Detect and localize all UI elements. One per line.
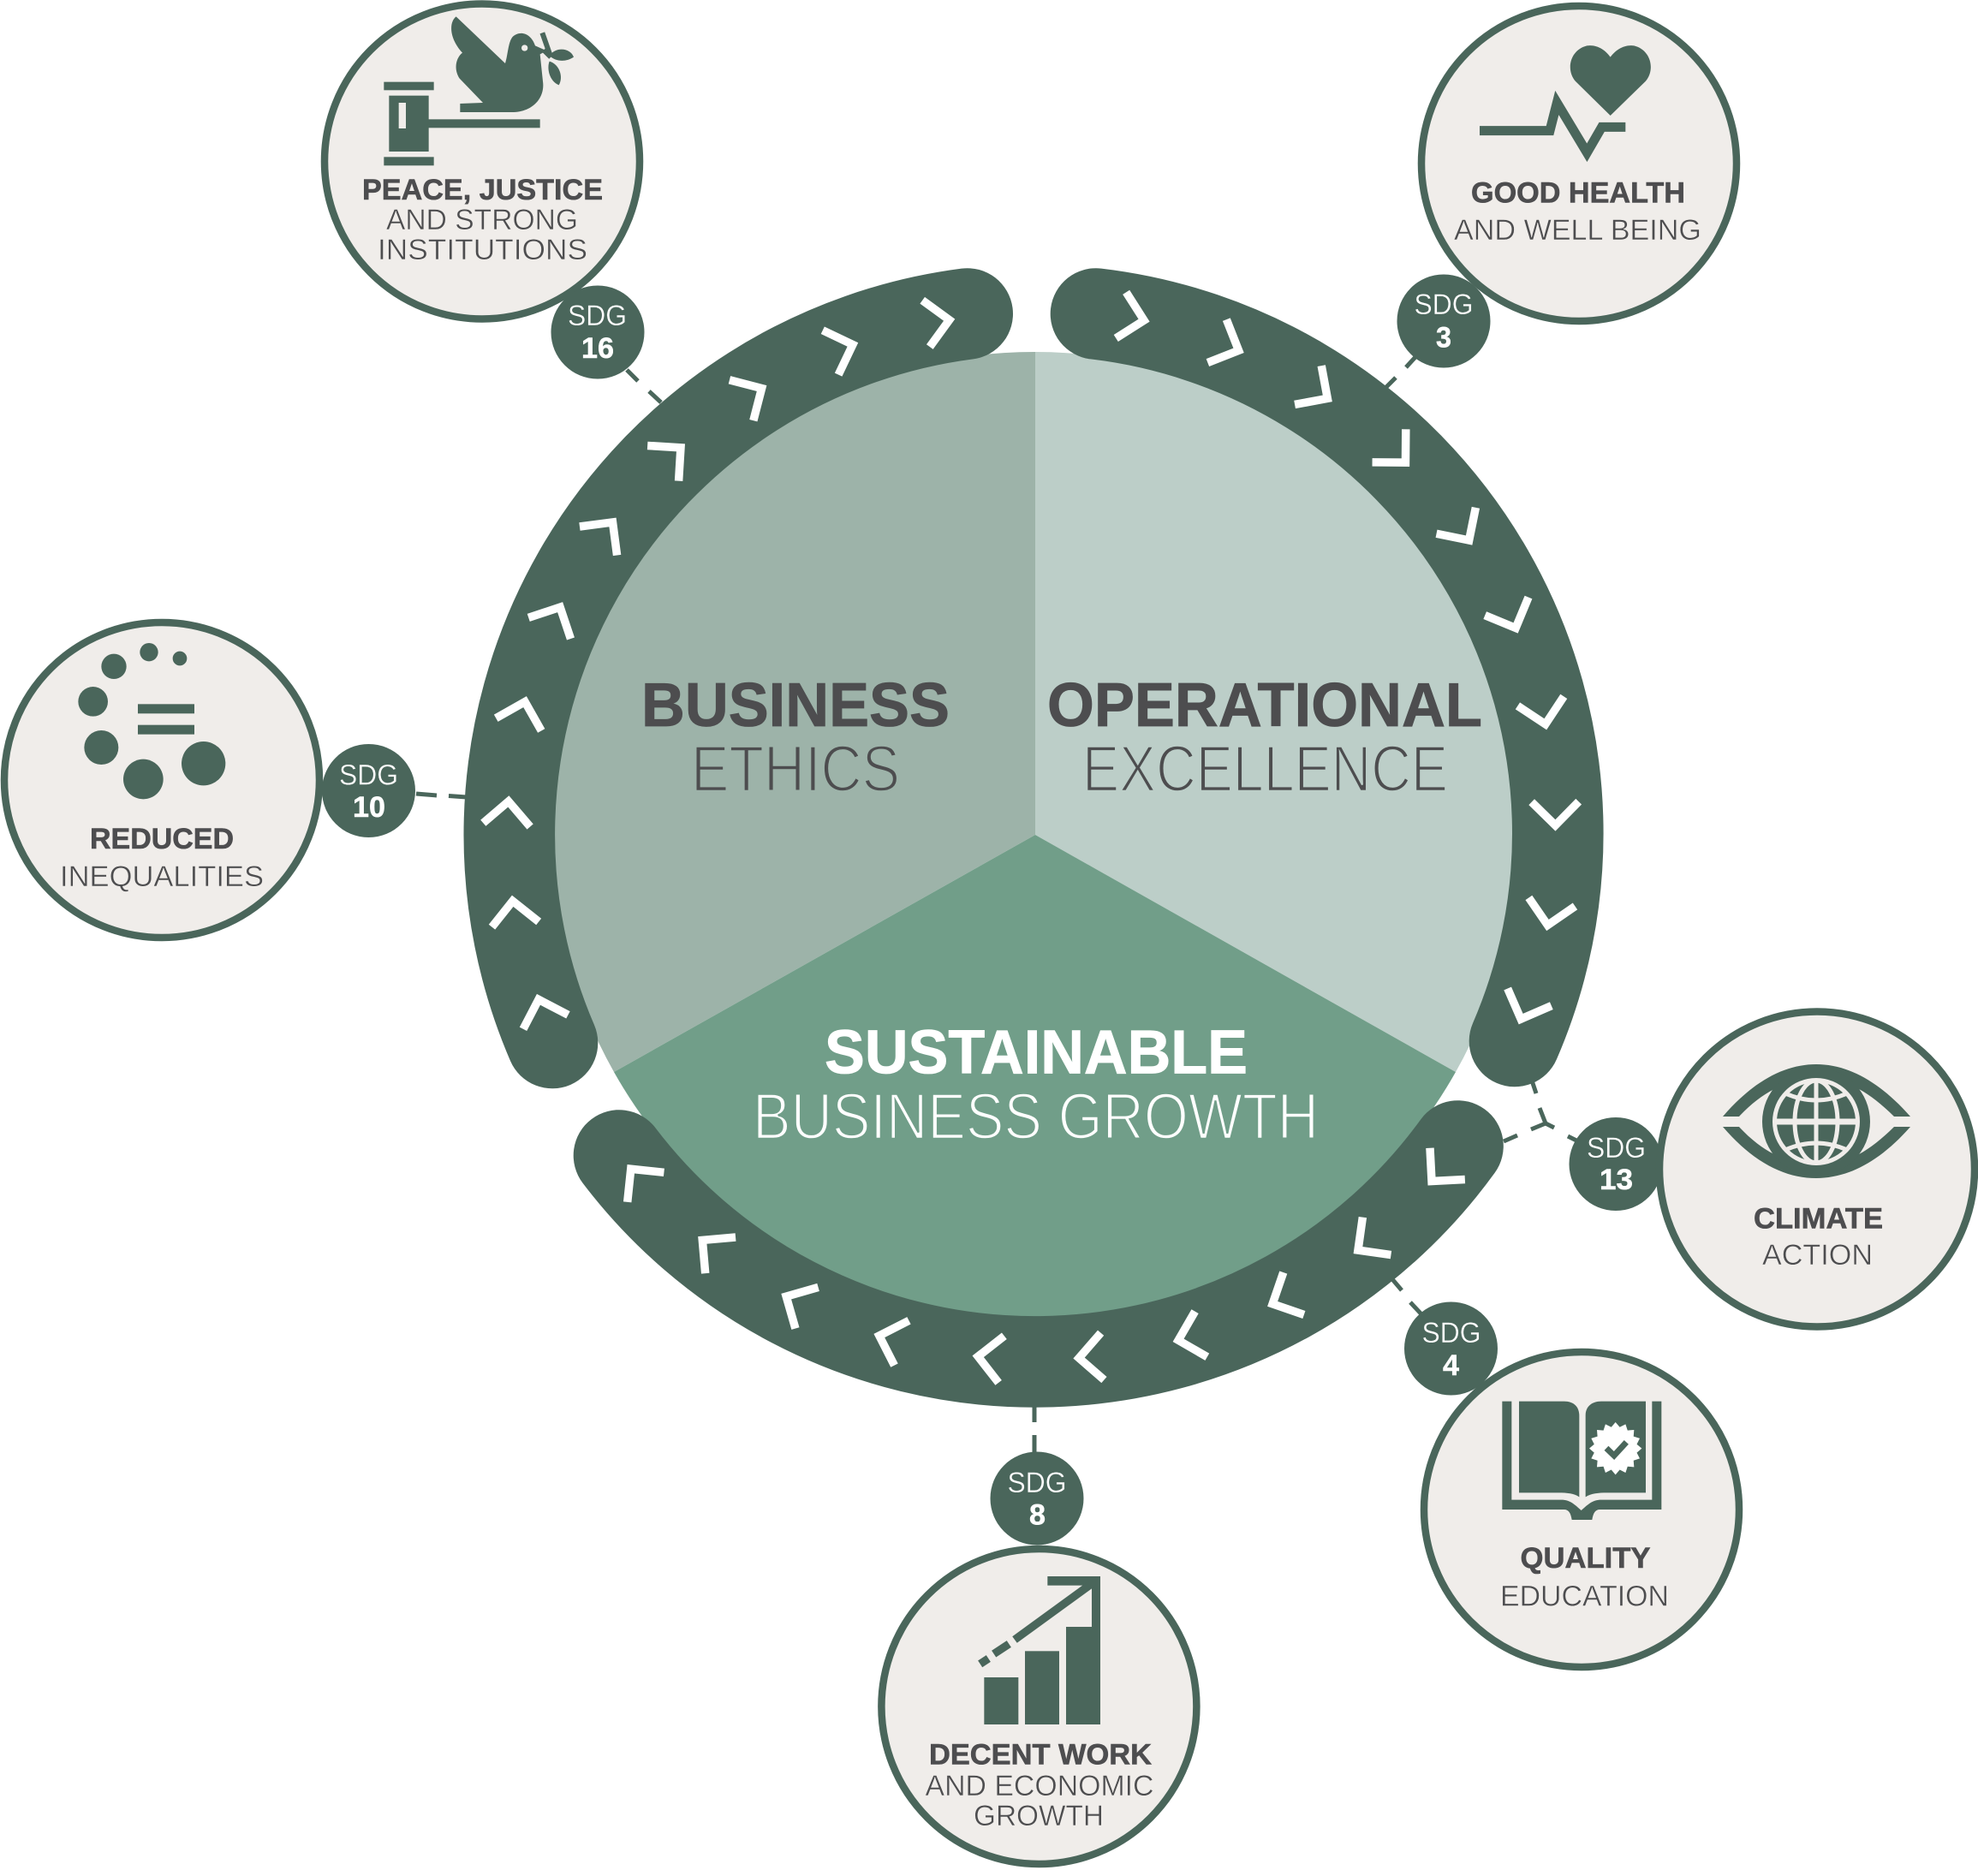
label: peace, justice: PEACE, JUSTICE bbox=[362, 174, 603, 206]
icon: open book with badge bbox=[1502, 1402, 1661, 1520]
segment: operational excellence bbox=[1035, 352, 1518, 1072]
heading: operational excellence: OPERATIONAL bbox=[1047, 671, 1482, 740]
label: decent work: DECENT WORK bbox=[929, 1738, 1152, 1771]
badge: SDG 8: 8 bbox=[1029, 1499, 1046, 1532]
label: reduced inequalities bbox=[60, 823, 264, 893]
panel: decent work and economic growth bbox=[881, 1549, 1196, 1864]
panel: central pie bbox=[551, 352, 1518, 1318]
badge: SDG 16: SDG bbox=[568, 300, 627, 332]
badge: SDG 8: SDG bbox=[1007, 1467, 1067, 1499]
label: peace, justice: AND STRONG bbox=[386, 204, 578, 236]
heading: business ethics: BUSINESS bbox=[641, 671, 950, 740]
heading: business ethics: ETHICS bbox=[691, 733, 900, 806]
icon: eye with globe bbox=[1723, 1064, 1910, 1178]
icon: gavel and dove bbox=[384, 16, 574, 165]
label: good health bbox=[1454, 177, 1701, 247]
label: good health: GOOD HEALTH bbox=[1471, 177, 1685, 210]
connector: SDG 13 bbox=[1504, 1081, 1580, 1142]
connector: SDG 10 bbox=[416, 794, 467, 797]
heading: sustainable business growth bbox=[753, 1019, 1319, 1153]
label: peace, justice bbox=[362, 174, 603, 266]
badge: SDG 16: 16 bbox=[581, 332, 614, 365]
label: climate action bbox=[1754, 1202, 1883, 1272]
panel: climate action bbox=[1659, 1012, 1975, 1327]
label: decent work: GROWTH bbox=[974, 1800, 1104, 1832]
badge: SDG 3: 3 bbox=[1436, 322, 1451, 354]
label: quality education: EDUCATION bbox=[1500, 1581, 1669, 1613]
badge: SDG 16 bbox=[551, 286, 644, 378]
segment: business ethics bbox=[551, 352, 1035, 1072]
badge: SDG 13: SDG bbox=[1587, 1132, 1646, 1164]
arc arrow: right ring segment bbox=[1096, 292, 1579, 1041]
connector: SDG 4 bbox=[1392, 1279, 1423, 1316]
label: quality education: QUALITY bbox=[1521, 1542, 1651, 1575]
label: decent work bbox=[925, 1738, 1154, 1832]
label: decent work: AND ECONOMIC bbox=[925, 1770, 1154, 1802]
badge: SDG 3 bbox=[1397, 274, 1490, 368]
panel: peace, justice and strong institutions bbox=[325, 3, 640, 319]
badge: SDG 13: 13 bbox=[1600, 1164, 1633, 1196]
label: peace, justice: INSTITUTIONS bbox=[378, 234, 587, 266]
label: climate action: CLIMATE bbox=[1754, 1202, 1883, 1235]
badge: SDG 13 bbox=[1569, 1117, 1663, 1211]
badge: SDG 3: SDG bbox=[1415, 289, 1473, 321]
heading: operational excellence bbox=[1047, 671, 1482, 806]
label: climate action: ACTION bbox=[1762, 1239, 1873, 1272]
badge: SDG 10 bbox=[322, 744, 415, 837]
arc arrow: bottom ring segment bbox=[612, 1146, 1465, 1383]
badge: SDG 4: SDG bbox=[1421, 1317, 1481, 1349]
heading: operational excellence: EXCELLENCE bbox=[1082, 733, 1448, 806]
panel: reduced inequalities bbox=[4, 622, 319, 938]
label: quality education bbox=[1500, 1542, 1669, 1613]
badge: SDG 10: SDG bbox=[339, 759, 398, 792]
badge: SDG 8 bbox=[990, 1452, 1084, 1545]
arc arrow: left ring segment bbox=[483, 296, 968, 1043]
connector: SDG 16 bbox=[627, 370, 661, 402]
icon: growing dots and equals sign bbox=[78, 643, 225, 799]
panel: quality education bbox=[1424, 1352, 1739, 1667]
icon: rising bars and arrow bbox=[980, 1576, 1100, 1724]
label: reduced inequalities: REDUCED bbox=[90, 823, 234, 855]
badge: SDG 10: 10 bbox=[353, 791, 385, 824]
icon: heart and pulse bbox=[1480, 45, 1651, 152]
label: reduced inequalities: INEQUALITIES bbox=[60, 861, 264, 893]
label: good health: AND WELL BEING bbox=[1454, 214, 1701, 247]
heading: sustainable business growth: SUSTAINABLE bbox=[825, 1019, 1248, 1087]
panel: good health and well being bbox=[1421, 6, 1737, 321]
heading: business ethics bbox=[641, 671, 950, 806]
connector: SDG 3 bbox=[1385, 357, 1415, 388]
connector: SDG 8 bbox=[1033, 1404, 1036, 1454]
segment: sustainable business growth bbox=[614, 835, 1456, 1318]
heading: sustainable business growth: BUSINESS GROWTH bbox=[753, 1081, 1319, 1153]
badge: SDG 4: 4 bbox=[1443, 1349, 1459, 1382]
badge: SDG 4 bbox=[1404, 1301, 1498, 1396]
